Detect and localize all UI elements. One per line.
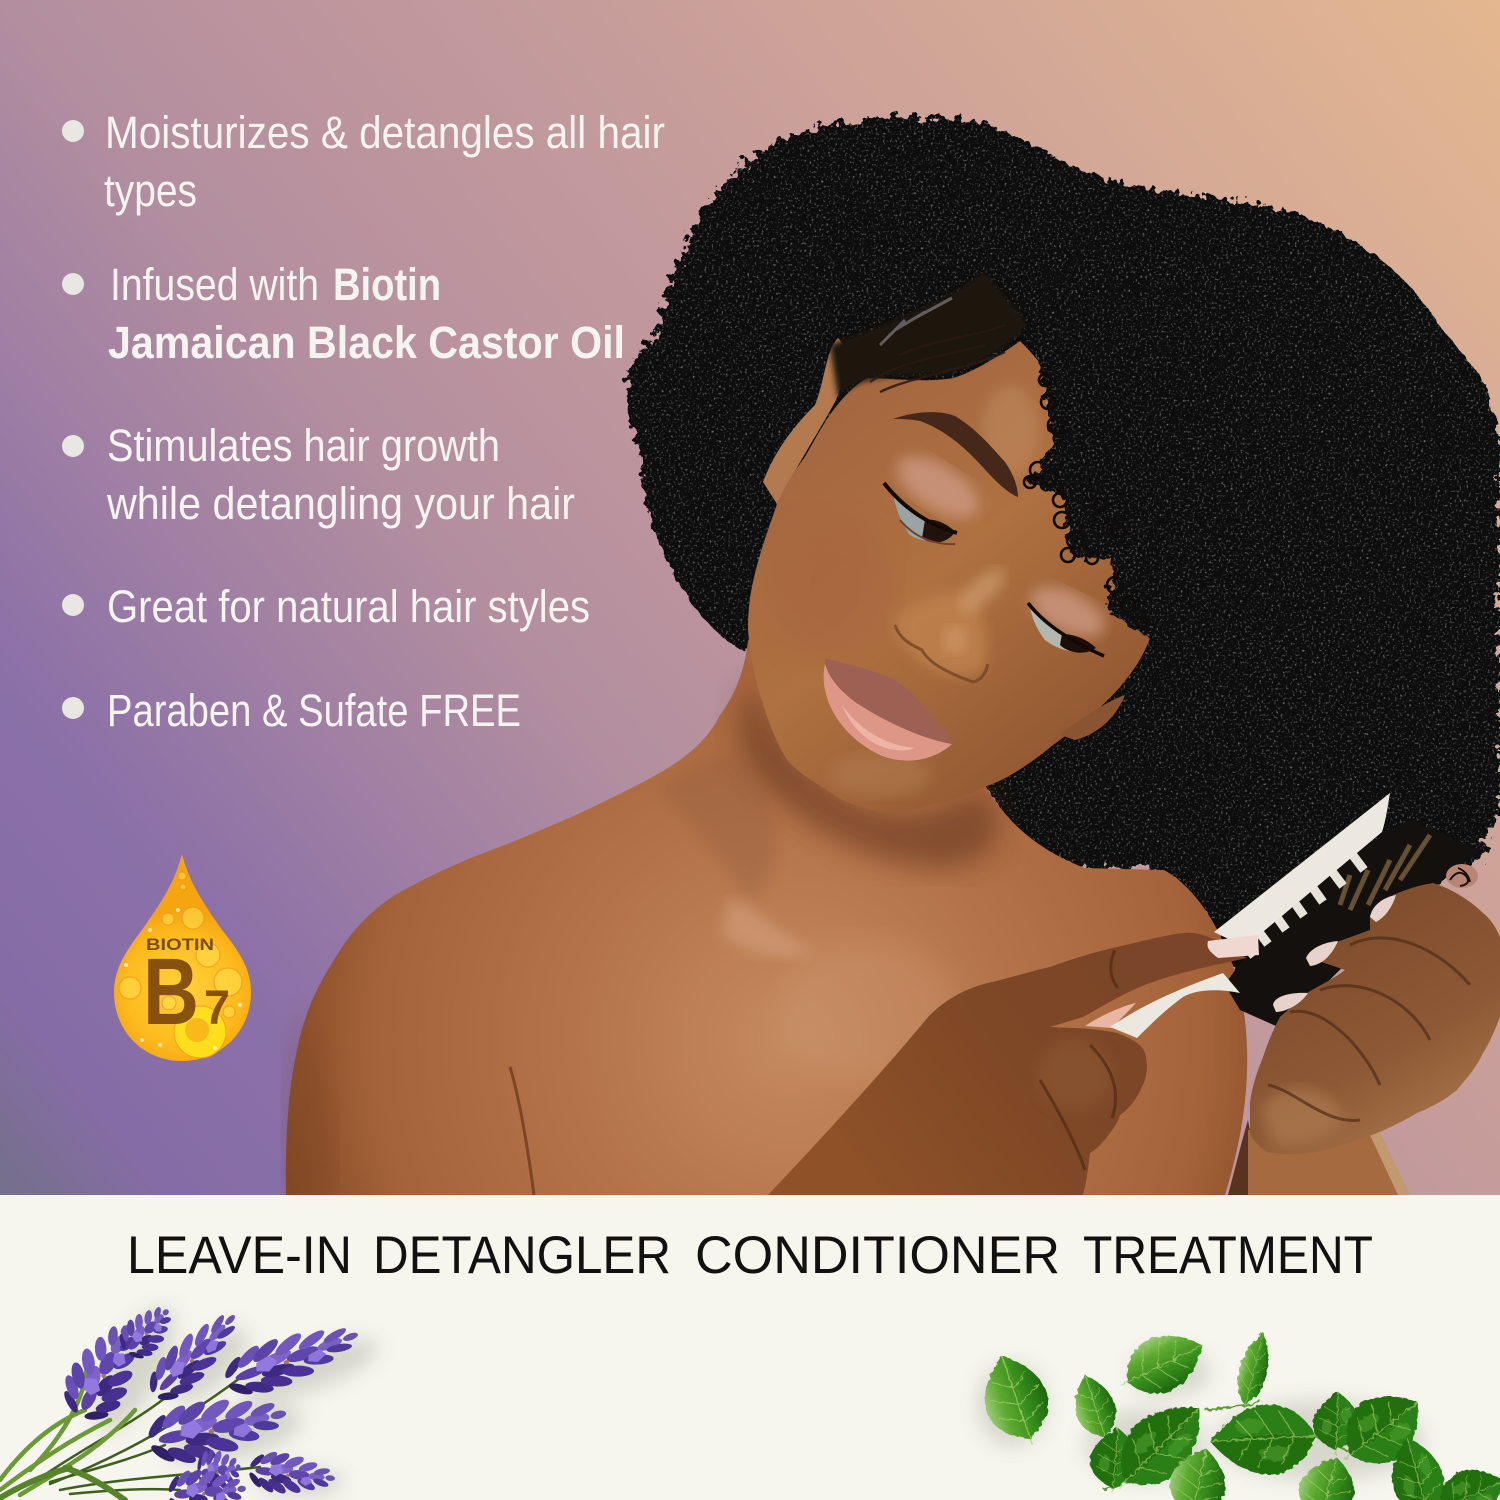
mint leaf 1 [984, 1356, 1048, 1445]
title: CONDITIONER [695, 1226, 1060, 1285]
bullet 1: types [104, 165, 197, 216]
lavender shadow [80, 1296, 384, 1496]
bullet 2: Jamaican Black Castor Oil [108, 317, 625, 368]
mint leaf 3 [1074, 1374, 1117, 1437]
lavender flower spikes [64, 1325, 134, 1420]
icon: biotin B7 drop: B [143, 939, 199, 1045]
hairline and baby hairs [830, 272, 1028, 398]
collarbone highlight [722, 900, 815, 957]
title: TREATMENT [1083, 1226, 1373, 1285]
comb: teeth [1236, 846, 1364, 956]
mint leaf 12 [1392, 1438, 1444, 1500]
left hand: nail [1207, 935, 1259, 958]
title: DETANGLER [373, 1226, 671, 1285]
lavender stems and leaves [0, 1366, 260, 1500]
chin highlight [830, 753, 930, 797]
cheek tone [775, 515, 895, 665]
photo: woman detangling her hair [286, 100, 1500, 1195]
mint leaf 7 [1210, 1404, 1318, 1475]
mint leaf 4 [1089, 1427, 1133, 1493]
shoulders and chest [286, 640, 1247, 1195]
forearm behind hand [1228, 1120, 1410, 1195]
right eye [1028, 603, 1104, 656]
bullet 5: Paraben & Sufate FREE [107, 685, 521, 736]
mint leaves [971, 1319, 1500, 1500]
right eye shadow [1023, 576, 1113, 648]
title [127, 1226, 1373, 1285]
right hand: nails [1273, 895, 1396, 1012]
left eye [884, 483, 957, 544]
mint leaf 11 [1168, 1448, 1226, 1500]
mint leaf 2 [1120, 1335, 1203, 1394]
background gradient [0, 0, 1500, 1195]
hair: back volume [600, 100, 1500, 1020]
nose [895, 569, 1005, 682]
mint leaf 9 [1344, 1396, 1418, 1464]
icon: biotin B7 drop: BIOTIN [146, 936, 214, 954]
mint leaf 5 [1119, 1406, 1200, 1489]
left hand: palm pink [1085, 1003, 1136, 1028]
lips [824, 658, 954, 761]
comb [1214, 793, 1390, 956]
bullet 2: Biotin [333, 259, 441, 310]
left eye shadow [887, 444, 989, 530]
bullet 3: Stimulates hair growth [107, 420, 500, 471]
comb: spine [1214, 793, 1390, 947]
bullet 2 [62, 259, 625, 368]
comb handle [1110, 973, 1240, 1038]
right hand gripping hair [1250, 883, 1500, 1154]
shoulder edge shade [286, 1010, 335, 1195]
bullet 1: Moisturizes & detangles all hair [105, 107, 665, 158]
mint leaf 8 [1312, 1392, 1354, 1456]
mint leaf 6 [1237, 1332, 1269, 1411]
eyebrow [893, 412, 1018, 497]
jaw ear on right [1060, 695, 1125, 740]
feature list [62, 107, 665, 736]
chest highlight [780, 940, 960, 1080]
mint leaf group [971, 1319, 1500, 1500]
bullet 2: Infused with [110, 259, 319, 310]
title: LEAVE-IN [127, 1226, 352, 1285]
bottom panel [0, 1195, 1500, 1500]
bullet 3 [62, 420, 575, 529]
icon: biotin B7 drop [114, 854, 251, 1061]
mint stems [1024, 1400, 1350, 1490]
icon: biotin B7 drop: 7 [204, 982, 230, 1035]
arm crease [510, 1067, 534, 1195]
bullet 1 [62, 107, 665, 216]
mint shadow [977, 1348, 1425, 1481]
lavender sprigs [0, 1294, 384, 1500]
hair highlights [1340, 835, 1478, 910]
bullet 4: Great for natural hair styles [107, 581, 590, 632]
hair: bangs and curls [1017, 284, 1232, 640]
mint leaf 10 [1298, 1457, 1355, 1500]
mint leaf 13 [1440, 1470, 1500, 1500]
ear [763, 338, 845, 504]
left hand holding comb [768, 933, 1259, 1195]
bullet 3: while detangling your hair [106, 478, 575, 529]
face [748, 341, 1150, 812]
neck shadow [739, 680, 998, 868]
hair strand through comb [1225, 820, 1480, 1030]
forehead highlight [982, 385, 1038, 475]
neck tone [660, 755, 776, 900]
